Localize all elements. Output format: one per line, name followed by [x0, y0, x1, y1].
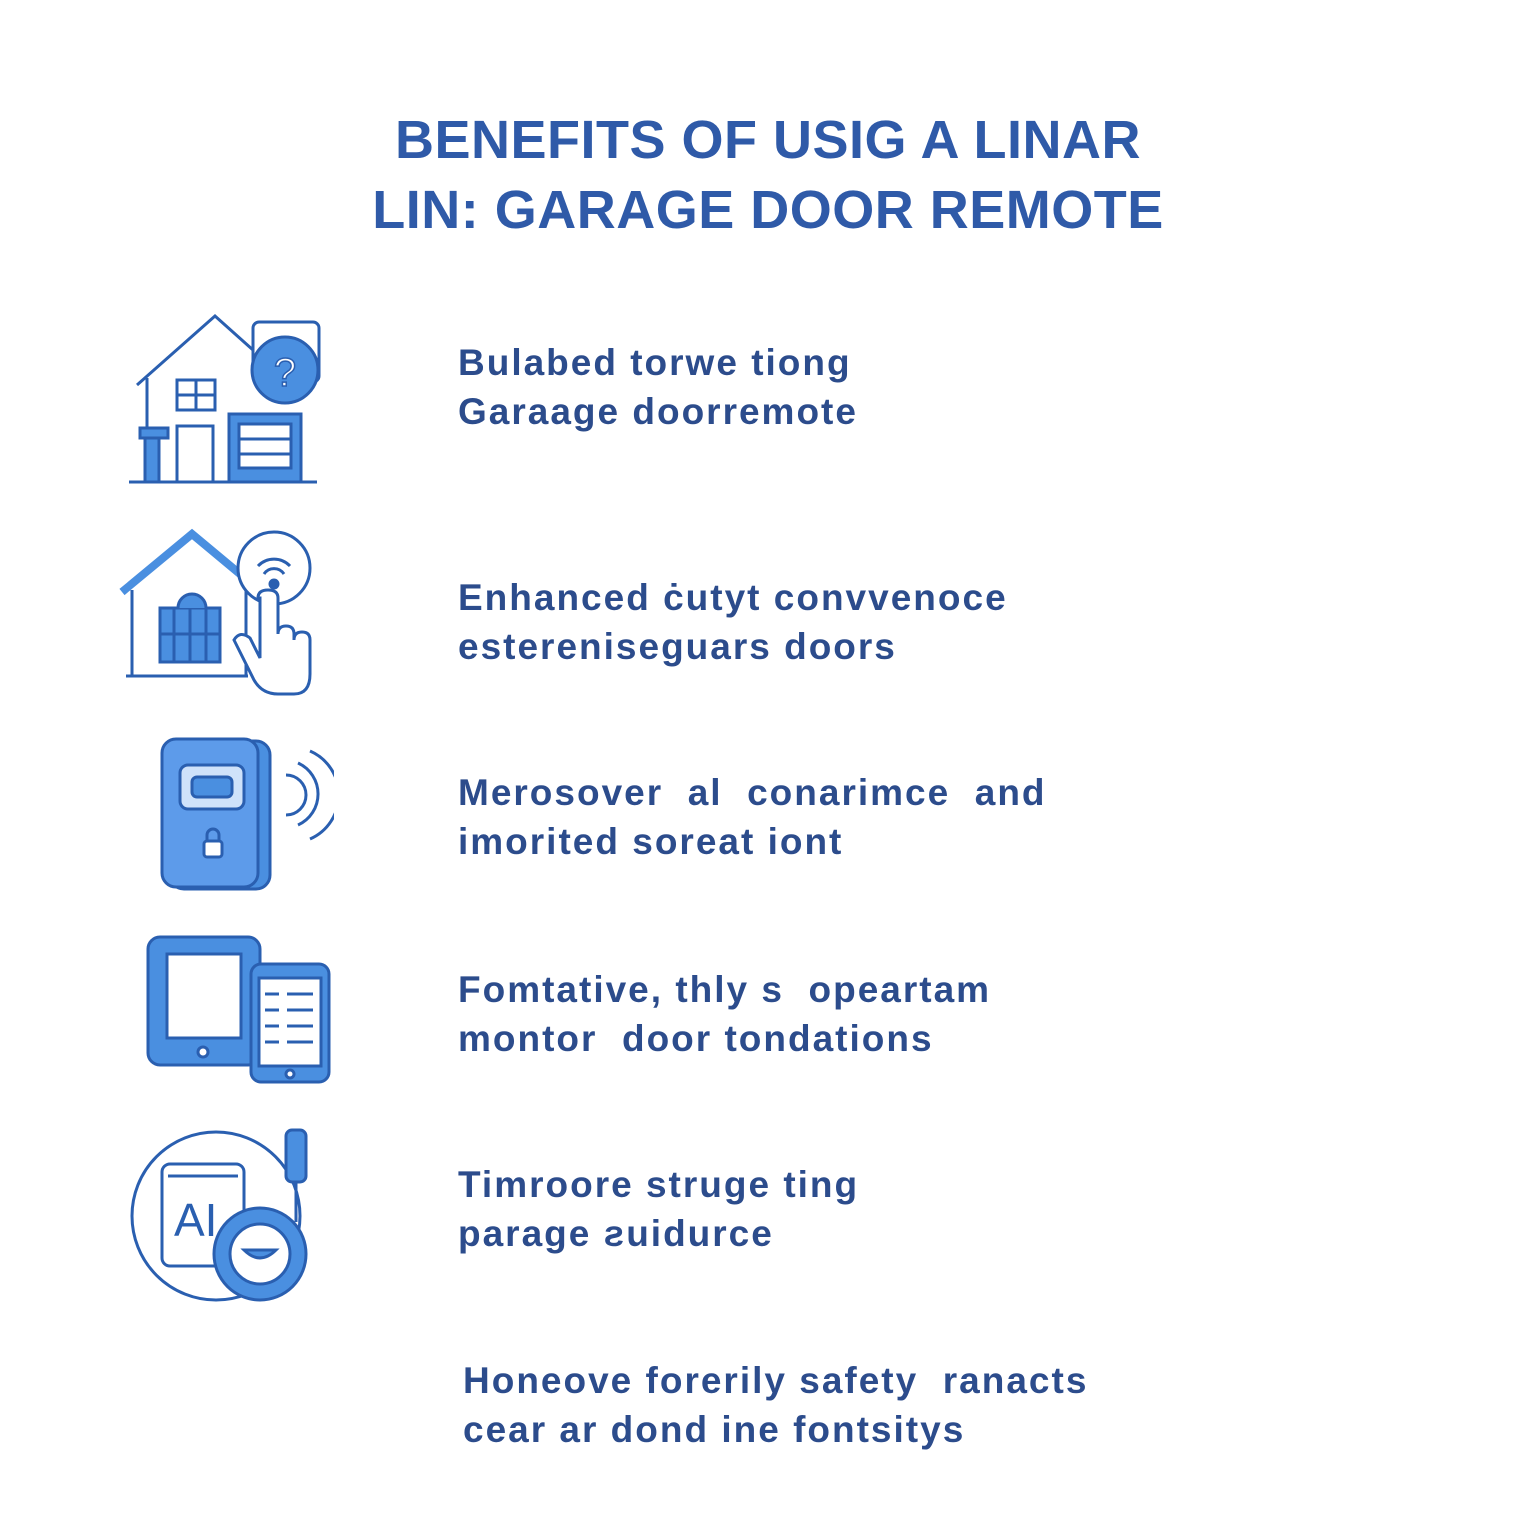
text: benefit 4: montor door tondations	[458, 1018, 934, 1059]
text: benefit 3: Merosover al conarimce and	[458, 772, 1047, 813]
title: LIN: GARAGE DOOR REMOTE	[372, 180, 1164, 240]
text: benefit 4: Fomtative, thly s opeartam	[458, 969, 991, 1010]
text: benefit 2: Enhanced ċutyt convvenoce	[458, 577, 1008, 618]
icon: AI circle	[130, 1128, 308, 1302]
icon: tablet and phone	[146, 936, 330, 1084]
text: benefit 1	[458, 342, 858, 432]
text: benefit 3	[458, 772, 1047, 862]
icon: AI circle: AI	[174, 1194, 217, 1246]
title	[372, 110, 1164, 240]
text: benefit 6	[463, 1360, 1088, 1450]
text: benefit 6: cear ar dond ine fontsitys	[463, 1409, 965, 1450]
text: benefit 1: Bulabed torwe tiong	[458, 342, 852, 383]
text: benefit 2: esterenisеguars doors	[458, 626, 897, 667]
title: BENEFITS OF USIG A LINAR	[395, 110, 1141, 170]
text: benefit 1: Garaage doorremote	[458, 391, 858, 432]
text: benefit 5	[458, 1164, 859, 1254]
icon: remote	[160, 738, 334, 890]
text: benefit 5: parage ƨuidurce	[458, 1213, 774, 1254]
text: benefit 3: imorited soreat iont	[458, 821, 843, 862]
text: benefit 4	[458, 969, 991, 1059]
text: benefit 6: Honeove forerіly safety ranacts	[463, 1360, 1088, 1401]
icon: house with wifi hand	[120, 528, 312, 696]
text: benefit 5: Timroore strugе ting	[458, 1164, 859, 1205]
icon: house with question	[129, 314, 320, 484]
icon: house with question: ?	[274, 351, 296, 395]
text: benefit 2	[458, 577, 1008, 667]
